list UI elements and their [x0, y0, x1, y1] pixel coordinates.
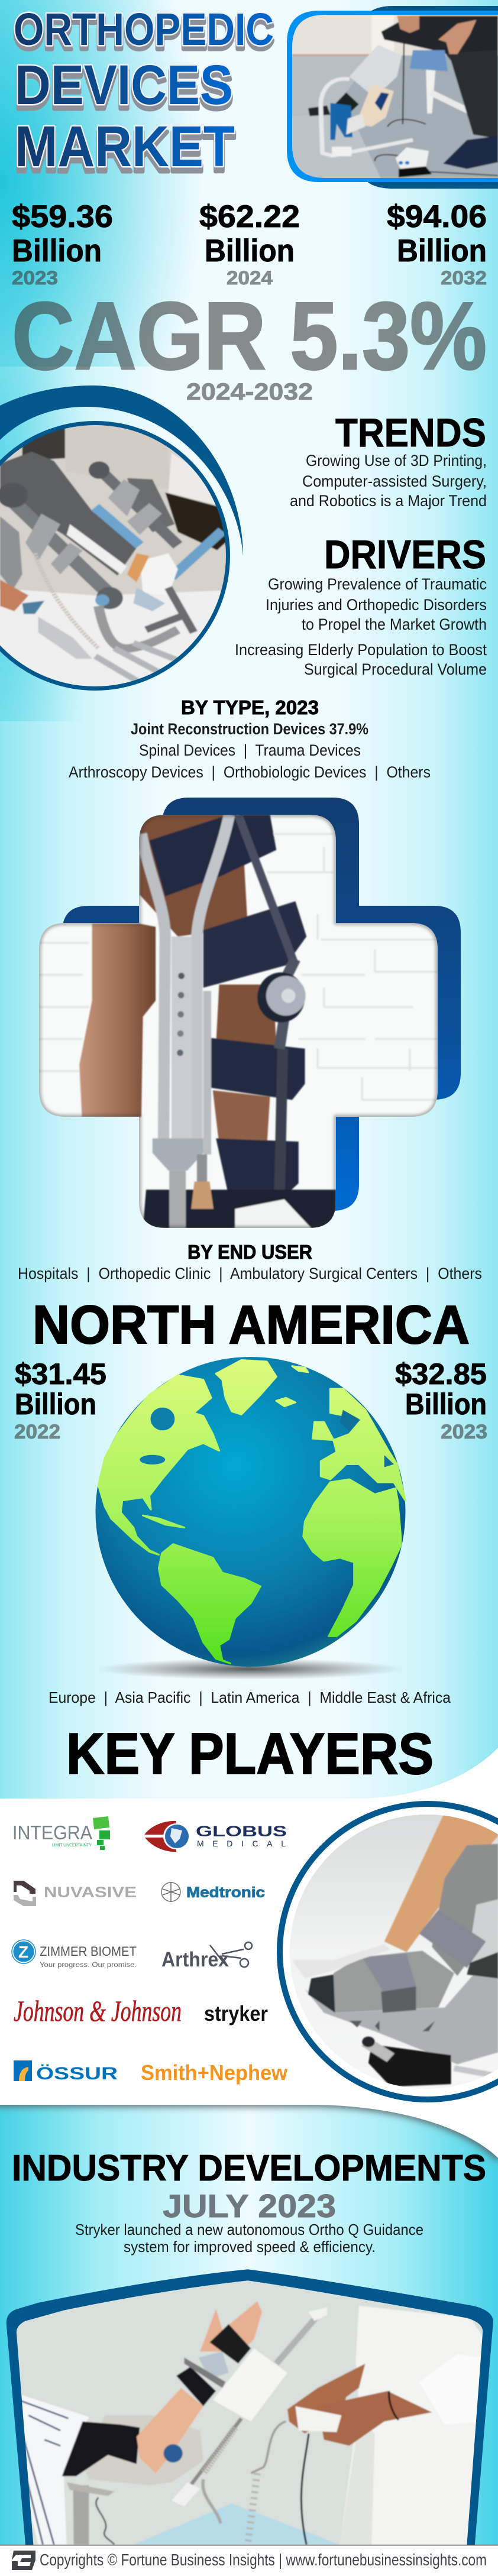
icon: Fortune Business Insights logo [12, 2551, 35, 2570]
text: drivers description: to Propel the Market Growth [302, 615, 487, 633]
heading: by type: BY TYPE, 2023 [181, 696, 319, 718]
CAGR period: 2024-2032 [186, 379, 313, 405]
text: other segments [69, 741, 431, 781]
logo: Integra [12, 1816, 110, 1850]
logo: Stryker: stryker [204, 2001, 268, 2026]
stat: north america 2023: $32.85 [395, 1357, 487, 1391]
stat: north america 2022: Billion [15, 1388, 96, 1421]
logo: Integra: INTEGRA [12, 1822, 92, 1843]
text: trends description [290, 452, 487, 510]
logo: NuVasive: NUVASIVE [44, 1884, 137, 1901]
logo: Arthrex [161, 1942, 252, 1971]
stat: 2024 value: Billion [205, 234, 295, 268]
stat: 2023 value: $59.36 [12, 199, 113, 234]
logo: Arthrex: Arthrex [161, 1948, 229, 1971]
text: other regions: Europe | Asia Pacific | Latin America | Middle East & Africa [48, 1689, 451, 1706]
logo: Globus Medical: GLOBUS [196, 1823, 287, 1840]
stat: 2024 value [199, 199, 300, 289]
photo panel: arm rehabilitation machine [7, 2269, 493, 2546]
stat: 2023 value [12, 199, 113, 289]
title: Orthopedic Devices Market [14, 4, 274, 184]
stat: north america 2022 [14, 1357, 106, 1443]
text: trends description: Growing Use of 3D Printing, [306, 452, 487, 469]
text: drivers description: Growing Prevalence of Traumatic [268, 575, 487, 593]
stat: 2032 value [387, 199, 487, 289]
stat: 2032 value: $94.06 [387, 199, 487, 234]
logo: Integra: LIMIT UNCERTAINTY [52, 1842, 92, 1848]
title: Orthopedic Devices Market: MARKET [15, 114, 235, 179]
stat: 2024 value: 2024 [227, 267, 273, 289]
stat: north america 2022: $31.45 [15, 1357, 106, 1391]
stat: north america 2023 [395, 1357, 487, 1443]
logo: Globus Medical [144, 1821, 287, 1852]
logo: Smith and Nephew: Smith+Nephew [141, 2060, 288, 2085]
text: drivers description: Increasing Elderly Population to Boost [235, 641, 487, 659]
logo: Medtronic [161, 1882, 265, 1902]
logo: Johnson and Johnson: Johnson & Johnson [14, 1994, 182, 2027]
section: by end user [18, 1241, 482, 1282]
stat: 2024 value: $62.22 [199, 199, 300, 234]
heading: industry developments: INDUSTRY DEVELOPMENTS [12, 2148, 486, 2189]
section: industry developments [12, 2148, 486, 2256]
logo: NuVasive [14, 1881, 137, 1906]
stat: north america 2023: 2023 [441, 1421, 487, 1443]
text: development description: system for improved speed & efficiency. [124, 2238, 376, 2256]
heading: by end user: BY END USER [187, 1241, 312, 1263]
text: development description: Stryker launched a new autonomous Ortho Q Guidance [75, 2221, 423, 2238]
stat: north america 2023: Billion [405, 1388, 487, 1421]
stat: north america 2022: 2022 [14, 1421, 60, 1443]
heading: trends: TRENDS [335, 410, 486, 455]
panel: white key players band [0, 1748, 498, 2176]
title: Orthopedic Devices Market: ORTHOPEDIC [14, 8, 274, 59]
logo: Zimmer Biomet: ZIMMER BIOMET [40, 1944, 137, 1959]
stat: 2023 value: 2023 [12, 267, 58, 289]
heading: drivers: DRIVERS [324, 532, 486, 577]
icon: globe [96, 1357, 406, 1680]
section: by type [69, 696, 431, 781]
logo: Zimmer Biomet: Your progress. Our promise. [40, 1961, 137, 1969]
text: drivers description [235, 575, 487, 678]
heading: date: JULY 2023 [163, 2188, 336, 2224]
photo panel: circular leg machine [0, 421, 230, 691]
heading: north america: NORTH AMERICA [33, 1295, 470, 1355]
logo: Globus Medical: MEDICAL [197, 1839, 286, 1848]
text: trends description: Computer-assisted Surgery, [302, 472, 487, 490]
text: other segments: Arthroscopy Devices | Orthobiologic Devices | Others [69, 763, 431, 781]
text: leading segment: Joint Reconstruction Devices 37.9% [131, 720, 368, 738]
photo panel: cross shape with knee brace and crutch [35, 798, 461, 1236]
text: development description [75, 2221, 423, 2256]
panel: industry developments background [0, 2102, 498, 2545]
text: trends description: and Robotics is a Major Trend [290, 492, 487, 510]
stat: 2023 value: Billion [12, 234, 102, 268]
text: other segments: Spinal Devices | Trauma Devices [139, 741, 361, 759]
logo: Ossur: ÖSSUR [36, 2064, 118, 2084]
title: Orthopedic Devices Market: ORTHOPEDIC [14, 4, 274, 55]
title: Orthopedic Devices Market: DEVICES [15, 54, 233, 116]
logo: Ossur [14, 2060, 118, 2084]
title: Orthopedic Devices Market: DEVICES [15, 59, 233, 121]
heading: key players: KEY PLAYERS [66, 1721, 434, 1786]
footer [0, 2545, 498, 2576]
stat: 2032 value: 2032 [441, 267, 487, 289]
logo: Zimmer Biomet: Z [18, 1943, 28, 1961]
title: Orthopedic Devices Market: MARKET [15, 119, 235, 184]
section: drivers [235, 532, 487, 678]
stat: 2032 value: Billion [397, 234, 487, 268]
section: trends [290, 410, 487, 510]
photo panel: leg rehabilitation device [286, 6, 498, 189]
photo panel: walking boot [280, 1804, 498, 2099]
text: drivers description: Injuries and Orthopedic Disorders [266, 596, 487, 614]
text: drivers description: Surgical Procedural Volume [304, 660, 487, 678]
logo: Medtronic: Medtronic [186, 1884, 265, 1901]
decorative crescent: dark blue arc [0, 385, 243, 556]
logo: Zimmer Biomet [12, 1940, 137, 1969]
